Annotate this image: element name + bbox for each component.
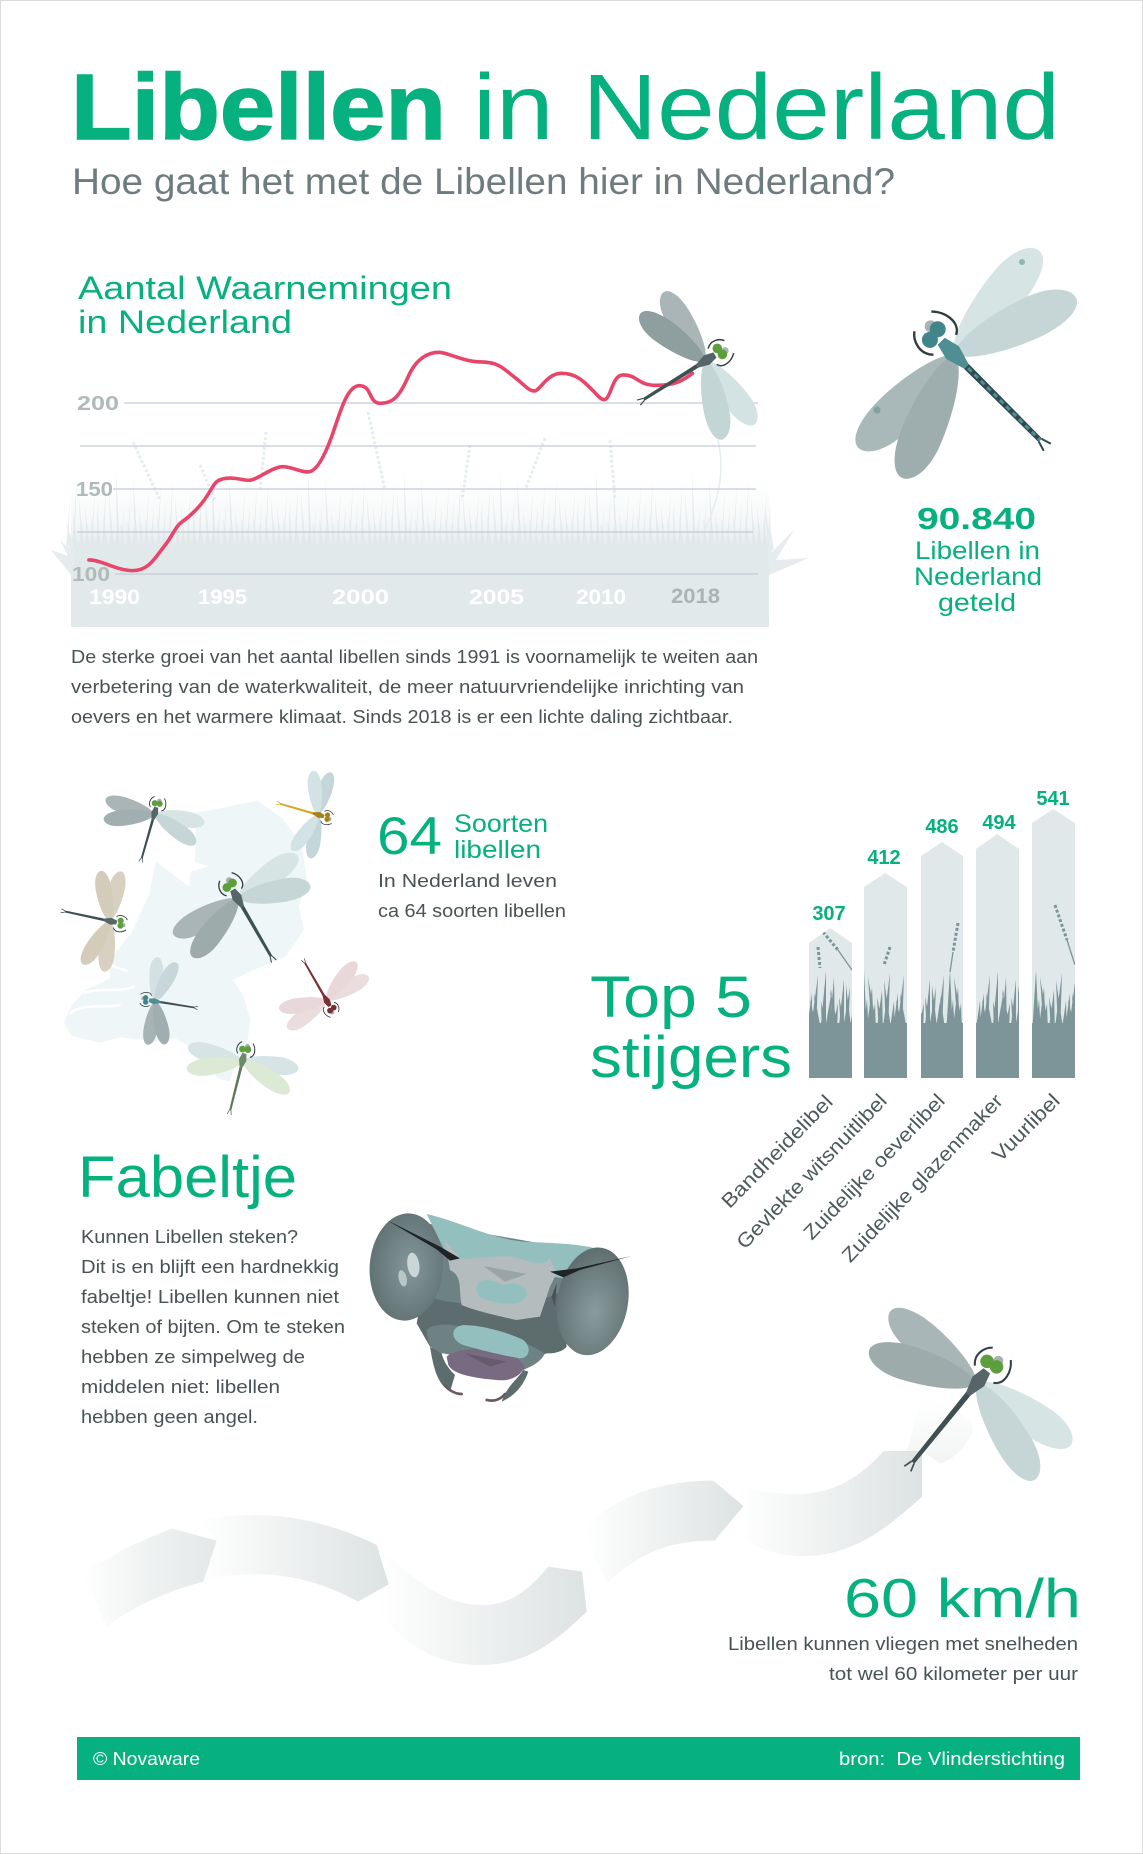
x axis labels: 2005 [469, 586, 524, 609]
footer bar: © Novaware [93, 1749, 200, 1769]
y axis labels: 150 [76, 479, 113, 501]
bar values: 494 [982, 812, 1017, 834]
panel: species map [50, 760, 566, 1128]
myth text: Kunnen Libellen steken? [81, 1227, 298, 1247]
bar category labels: Zuidelijke oeverlibel [800, 1090, 950, 1244]
species heading: libellen [454, 836, 541, 864]
y axis labels: 200 [77, 393, 119, 415]
bar category labels: Zuidelijke glazenmaker [838, 1090, 1008, 1267]
bar values: 307 [812, 903, 846, 925]
y axis labels [72, 393, 119, 586]
x axis labels [89, 585, 720, 609]
arrow bar chart [805, 809, 1080, 1078]
data line [89, 352, 692, 571]
icon: grey dragonfly [92, 783, 209, 876]
chart heading [78, 270, 452, 340]
grid lines [77, 403, 758, 574]
bar values: 486 [925, 816, 959, 838]
bar values: 412 [867, 847, 901, 869]
panel: line chart of observations [51, 270, 809, 627]
x axis labels: 2018 [671, 585, 720, 608]
myth text: hebben ze simpelweg de [81, 1347, 305, 1367]
speed text: tot wel 60 kilometer per uur [829, 1664, 1078, 1684]
species text: ca 64 soorten libellen [378, 901, 566, 921]
stat caption: geteld [938, 589, 1016, 617]
top 5 heading [590, 965, 792, 1090]
title [71, 55, 1060, 159]
icon: central dragonfly [161, 839, 338, 998]
chart description: verbetering van de waterkwaliteit, de meer natuurvriendelijke inrichting van [71, 677, 744, 697]
stat caption: Libellen in [915, 537, 1040, 565]
icon: green dragonfly [174, 1028, 302, 1128]
panel: myth [78, 1145, 637, 1427]
title: in Nederland [473, 55, 1060, 159]
icon: flying dragonfly [820, 1282, 1090, 1540]
myth heading: Fabeltje [78, 1145, 297, 1210]
map of the Netherlands [64, 801, 307, 1082]
bar category labels [717, 1090, 1065, 1267]
speed text: Libellen kunnen vliegen met snelheden [728, 1634, 1078, 1654]
x axis labels: 1990 [89, 586, 140, 609]
chart description: De sterke groei van het aantal libellen sinds 1991 is voornamelijk te weiten aan [71, 647, 758, 667]
x axis labels: 2010 [576, 586, 626, 609]
stat: 90.840: 90.840 [917, 501, 1036, 536]
icon: large dragonfly [826, 226, 1143, 542]
top 5 heading: stijgers [590, 1025, 792, 1090]
footer bar: bron: De Vlinderstichting [839, 1749, 1065, 1769]
subtitle: Hoe gaat het met de Libellen hier in Nederland? [72, 161, 895, 202]
stat caption [914, 537, 1042, 617]
illustration: dragonfly head [366, 1211, 637, 1402]
y axis labels: 100 [72, 564, 110, 586]
x axis labels: 2000 [332, 586, 389, 609]
icon: beige dragonfly [50, 861, 138, 975]
species heading [377, 807, 548, 866]
chart heading: in Nederland [78, 304, 292, 340]
speed text [728, 1634, 1078, 1684]
species text [378, 871, 566, 921]
species heading: 64 [377, 807, 442, 866]
bar values: 541 [1036, 788, 1070, 810]
stat caption: Nederland [914, 563, 1042, 591]
speed heading: 60 km/h [844, 1567, 1081, 1629]
myth text: fabeltje! Libellen kunnen niet [81, 1287, 339, 1307]
myth text: hebben geen angel. [81, 1407, 258, 1427]
icon: teal dragonfly [133, 955, 205, 1052]
myth text: steken of bijten. Om te steken [81, 1317, 345, 1337]
top 5 heading: Top 5 [590, 965, 752, 1030]
icon: red dragonfly [261, 935, 377, 1039]
panel: top 5 risers [590, 788, 1080, 1267]
myth text [81, 1227, 345, 1427]
myth text: middelen niet: libellen [81, 1377, 280, 1397]
x axis labels: 1995 [198, 586, 247, 609]
species heading: Soorten [454, 810, 548, 838]
title: Libellen [71, 55, 446, 159]
grass background [51, 412, 809, 627]
panel: total counted [826, 226, 1143, 617]
panel: flight speed [83, 1282, 1090, 1684]
chart description [71, 647, 758, 727]
footer bar [77, 1737, 1080, 1780]
icon: yellow dragonfly [264, 760, 345, 862]
icon: dragonfly on chart [596, 278, 772, 471]
bar values [812, 788, 1070, 925]
bar category labels: Bandheidelibel [717, 1091, 838, 1213]
flight path ribbon [83, 1397, 973, 1665]
species text: In Nederland leven [378, 871, 557, 891]
bar category labels: Vuurlibel [988, 1090, 1065, 1166]
bar category labels: Gevlekte witsnuitlibel [733, 1090, 892, 1254]
myth text: Dit is en blijft een hardnekkig [81, 1257, 339, 1277]
chart heading: Aantal Waarnemingen [78, 270, 452, 306]
chart description: oevers en het warmere klimaat. Sinds 2018 is er een lichte daling zichtbaar. [71, 707, 733, 727]
